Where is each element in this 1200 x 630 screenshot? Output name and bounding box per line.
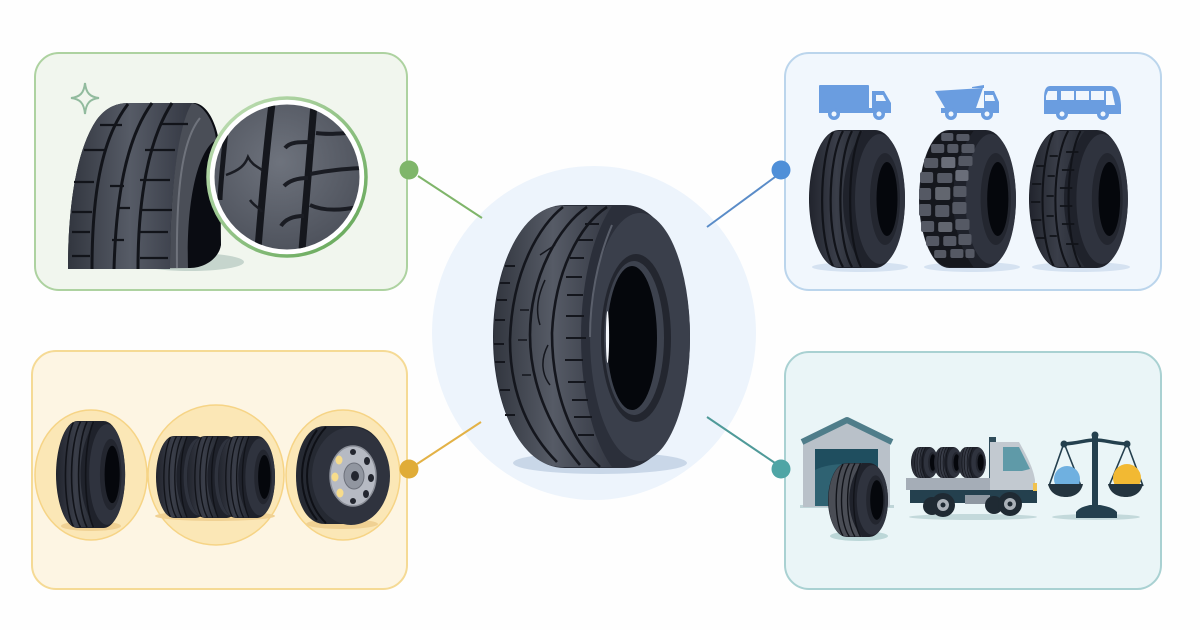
shadows under tires [812, 262, 1130, 272]
connector: green [400, 160, 482, 218]
tire at garage [828, 463, 888, 537]
tread face [494, 206, 612, 467]
bubble: tire on wheel [286, 410, 400, 540]
tread grooves [494, 207, 607, 467]
wheel opening [607, 266, 657, 410]
panel: tread close-up (green) [35, 53, 407, 290]
connector: yellow [400, 422, 481, 478]
panel: storage, delivery and cost (teal) [785, 352, 1161, 589]
bubble: single tire [35, 410, 147, 540]
icon: delivery truck [906, 437, 1037, 520]
icon: garage [800, 420, 894, 508]
icon: box truck [819, 85, 891, 120]
connector: teal [707, 417, 790, 478]
shadow [513, 452, 687, 474]
light gap [606, 311, 609, 363]
tire body [493, 205, 690, 468]
shadow under tire [830, 531, 888, 541]
tire: mixed tread [1029, 130, 1128, 268]
close-up tire [68, 103, 221, 269]
bubble: tire set [148, 405, 284, 545]
sidewall [590, 213, 690, 461]
central tire [493, 205, 690, 474]
icon: sparkle [71, 83, 99, 114]
central hub circle [432, 166, 756, 500]
magnifier lens [208, 98, 366, 256]
shadow under tire [136, 253, 244, 271]
icon: balance scale [1048, 432, 1143, 520]
icon: dump truck [935, 85, 999, 120]
icon: bus [1044, 86, 1121, 120]
panel: tire options (yellow) [32, 351, 407, 589]
tire: lug tread [919, 130, 1016, 268]
connector: blue [707, 160, 790, 227]
panel: vehicle types (blue) [785, 53, 1161, 290]
tire: rib tread [809, 130, 905, 268]
